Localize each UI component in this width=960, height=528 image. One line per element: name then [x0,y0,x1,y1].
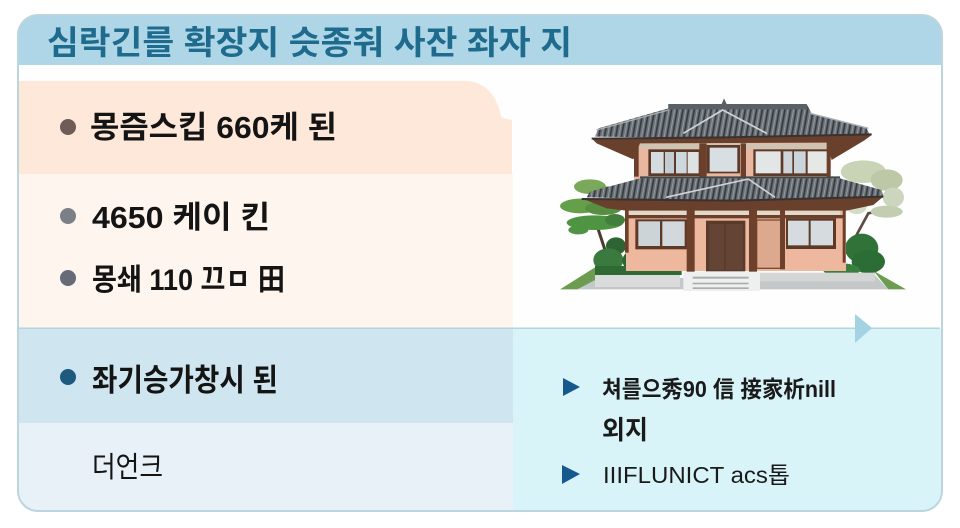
right list item 1: 쳐를으秀90 信 接家析nill [602,376,836,402]
panel: blue row [18,328,513,423]
bullet item 1: 몽즘스킵 660케 된 [90,110,337,145]
illustration: traditional house [560,98,906,291]
panel: right cyan block [513,329,942,511]
divider arrow [18,314,940,343]
lower windows [635,218,836,249]
entrance steps [683,272,760,291]
door [706,221,745,271]
panel: peach row [18,81,512,174]
right list item 1 [563,376,836,445]
upper storey wall [634,142,831,180]
right tree [841,160,904,236]
panel: pale blue row [18,423,513,511]
lawn corners [560,267,906,289]
panel: header band [18,15,942,65]
bullet item 4: 좌기승가창시 된 [92,363,278,398]
upper windows [634,143,831,177]
title: 심락긴를 확장지 슷종줘 사잔 좌자 지 [47,24,572,61]
panel: light peach row [18,174,513,328]
posts [625,206,846,275]
right list item 1: 외지 [602,415,648,445]
shrubs [593,234,885,277]
left tree [560,179,625,250]
lower eaves [582,197,883,211]
right list item 2: IIIFLUNICT acs톱 [603,462,790,488]
lower storey wall [626,206,846,271]
bullet item 2: 4650 케이 킨 [92,200,270,235]
bullet item 3: 몽쇄 110 끄ㅁ 田 [92,264,285,297]
lower roof [582,177,883,201]
text: pale row label: 더언크 [92,452,163,484]
upper roof [592,98,872,139]
side panel [757,220,781,268]
pavement [577,273,888,289]
upper eaves [592,135,872,160]
planter wall [595,275,680,287]
